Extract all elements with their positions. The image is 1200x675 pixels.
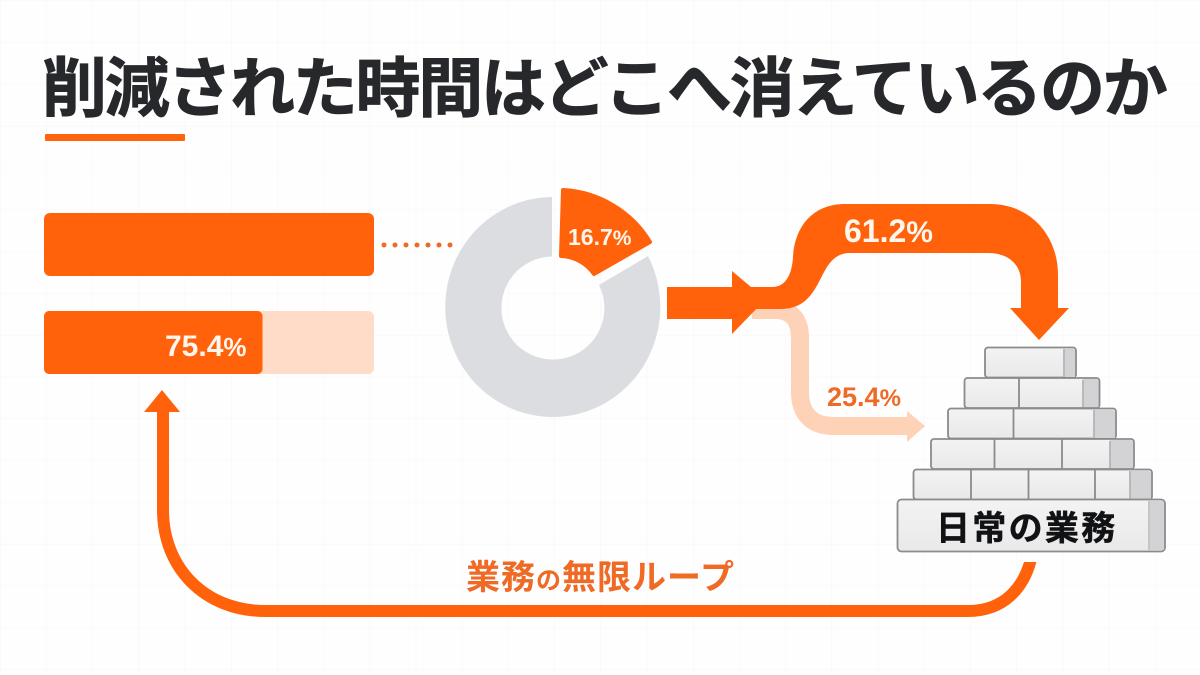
donut highlighted segment — [561, 190, 650, 274]
arrow: incoming flow — [667, 271, 762, 334]
label: 75.4%: 75.4% — [165, 330, 247, 363]
donut remainder segment — [445, 197, 660, 417]
brick base — [898, 500, 1165, 552]
bar: 75.4 percent fill — [44, 311, 262, 374]
arrow: light flow to bricks — [752, 310, 925, 442]
arrow: return loop — [144, 390, 1033, 611]
brick row 5 — [914, 470, 1152, 500]
label: 25.4%: 25.4% — [827, 382, 901, 412]
dotted connector — [382, 242, 452, 248]
title: 削減された時間はどこへ消えているのか — [42, 36, 1167, 130]
brick row 3 — [948, 408, 1116, 438]
label: 日常の業務: 日常の業務 — [936, 501, 1118, 550]
label: 業務の無限ループ: 業務の無限ループ — [466, 550, 735, 599]
title underline — [45, 134, 185, 141]
panel: bars — [44, 213, 374, 374]
brick row 1 — [985, 348, 1076, 378]
arrow: main flow to bricks — [750, 204, 1069, 340]
bar: full length — [44, 213, 374, 276]
chart: donut — [445, 190, 660, 417]
label: 61.2%: 61.2% — [844, 213, 933, 249]
bar: remaining track — [44, 311, 374, 374]
label: 16.7%: 16.7% — [568, 224, 632, 250]
brick row 2 — [964, 378, 1100, 408]
icon: brick pyramid — [898, 348, 1165, 552]
brick row 4 — [931, 439, 1134, 469]
